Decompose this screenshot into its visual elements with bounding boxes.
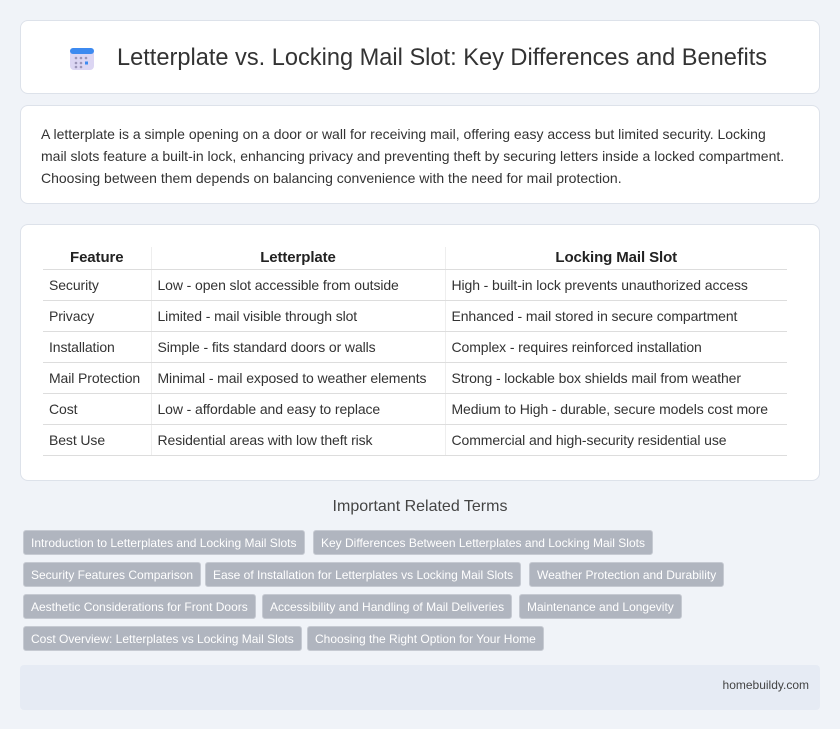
related term tags: Ease of Installation for Letterplates vs Locking Mail Slots	[213, 568, 513, 582]
header card	[20, 20, 820, 94]
comparison table: Installation	[49, 338, 115, 354]
related term tags: Choosing the Right Option for Your Home	[315, 632, 536, 646]
comparison table: Enhanced - mail stored in secure compartment	[452, 308, 737, 324]
intro text: A letterplate is a simple opening on a door or wall for receiving mail, offering easy access but limited security. Locking mail slots feature a built-in lock, enhancing privacy and preventing theft by securing letters inside a locked compartment. Choosing between them depends on balancing convenience with the need for mail protection.	[41, 126, 784, 186]
footer: homebuildy.com	[723, 678, 809, 692]
comparison table: Residential areas with low theft risk	[158, 432, 372, 448]
icon: calendar	[70, 48, 94, 70]
related terms heading: Important Related Terms	[333, 498, 507, 515]
footer	[20, 665, 820, 710]
comparison table: Privacy	[49, 308, 94, 324]
related term tags: Security Features Comparison	[31, 568, 193, 582]
comparison table: Simple - fits standard doors or walls	[158, 338, 376, 354]
comparison table: Strong - lockable box shields mail from weather	[452, 370, 741, 386]
comparison table: Minimal - mail exposed to weather elements	[158, 370, 426, 386]
comparison table: Security	[49, 276, 99, 292]
related term tags: Weather Protection and Durability	[537, 568, 716, 582]
related term tags: Accessibility and Handling of Mail Deliveries	[270, 600, 504, 614]
related term tags: Cost Overview: Letterplates vs Locking Mail Slots	[31, 632, 294, 646]
title: Letterplate vs. Locking Mail Slot: Key Differences and Benefits	[117, 45, 767, 71]
comparison table: High - built-in lock prevents unauthorized access	[452, 276, 748, 292]
comparison table: Limited - mail visible through slot	[158, 308, 357, 324]
comparison table: Low - open slot accessible from outside	[158, 276, 399, 292]
related term tags: Introduction to Letterplates and Locking Mail Slots	[31, 536, 296, 550]
comparison table: Feature	[70, 249, 124, 266]
comparison table: Low - affordable and easy to replace	[158, 400, 380, 416]
comparison table: Letterplate	[260, 249, 336, 266]
comparison table: Cost	[49, 400, 77, 416]
comparison table: Complex - requires reinforced installation	[452, 338, 702, 354]
related term tags: Key Differences Between Letterplates and Locking Mail Slots	[321, 536, 645, 550]
related term tags: Aesthetic Considerations for Front Doors	[31, 600, 248, 614]
comparison table: Commercial and high-security residential use	[452, 432, 726, 448]
comparison table: Best Use	[49, 432, 105, 448]
comparison table: Medium to High - durable, secure models cost more	[452, 400, 768, 416]
related term tags: Maintenance and Longevity	[527, 600, 674, 614]
comparison table: Mail Protection	[49, 370, 140, 386]
comparison table	[20, 224, 820, 481]
intro text	[20, 105, 820, 204]
comparison table: Locking Mail Slot	[555, 249, 677, 266]
